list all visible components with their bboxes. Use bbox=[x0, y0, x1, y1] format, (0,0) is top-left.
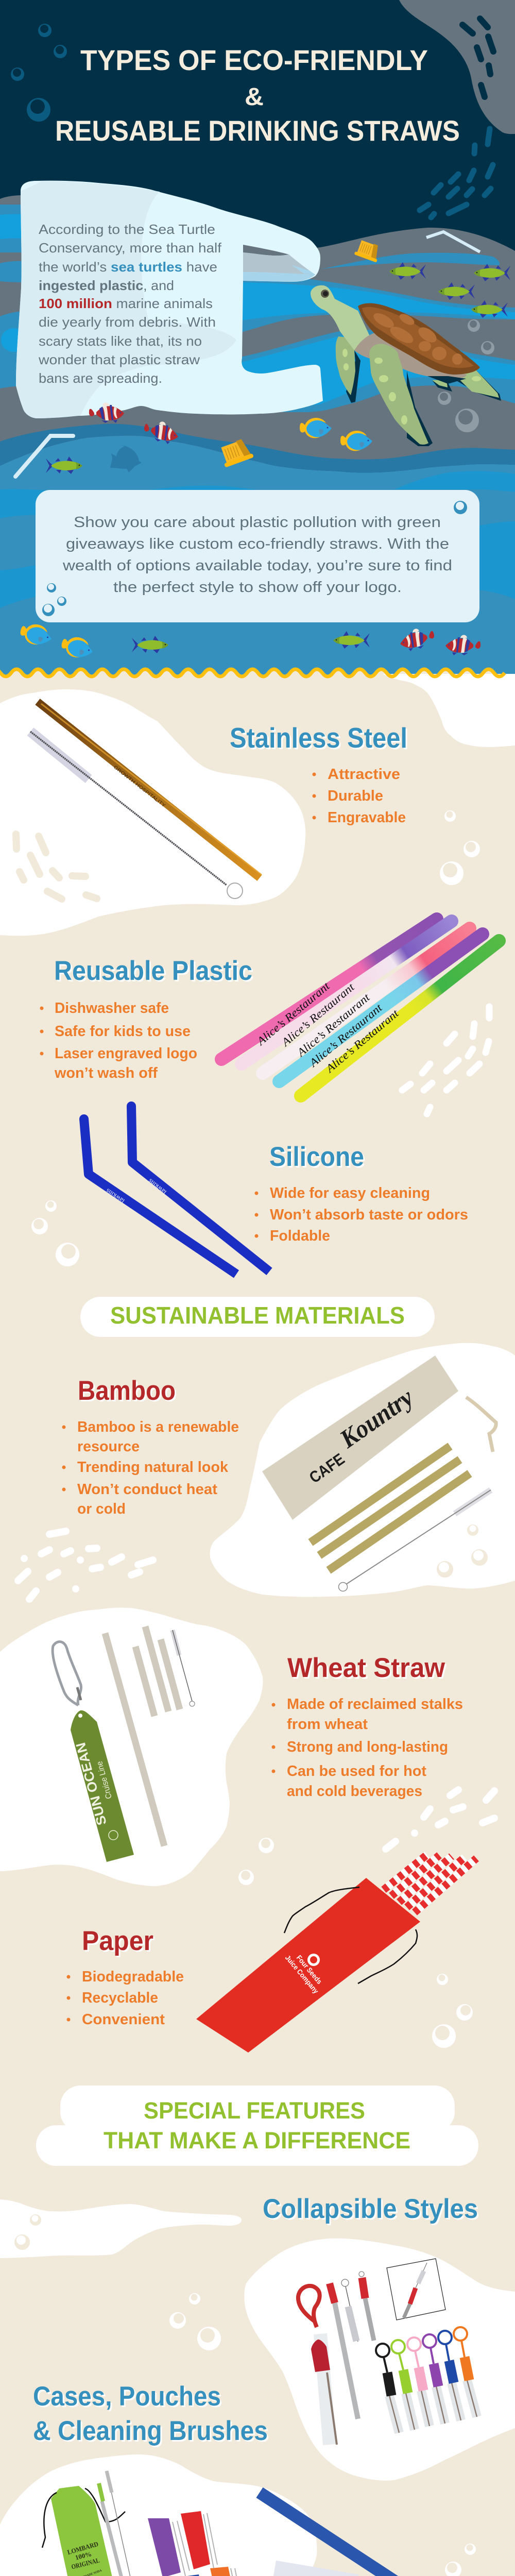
belly bbox=[354, 332, 467, 379]
text: bag statistics bbox=[38, 222, 222, 386]
bubbles top left bbox=[11, 24, 67, 122]
white blob bbox=[210, 1343, 515, 1597]
straw logos bbox=[105, 1177, 168, 1205]
title: REUSABLE DRINKING STRAWS bbox=[55, 114, 460, 147]
heading: Paper bbox=[82, 1926, 153, 1956]
text: bag statistics: ingested plastic , and bbox=[39, 278, 174, 293]
bullet list: won’t wash off bbox=[54, 1065, 158, 1081]
cream bubbles bbox=[437, 1524, 488, 1578]
bullet list: and cold beverages bbox=[287, 1783, 422, 1800]
image: bamboo straws bbox=[311, 1446, 470, 1570]
bullet list: from wheat bbox=[287, 1716, 368, 1733]
image: cleaning brush bbox=[30, 732, 243, 899]
panel: reusable plastic bbox=[40, 919, 499, 1114]
image: red pouch: Juice Company bbox=[284, 1954, 320, 1995]
text: bag statistics: 100 million marine animals bbox=[39, 296, 213, 311]
plastic bag bbox=[16, 181, 323, 418]
image: canvas pouch bbox=[262, 1355, 496, 1520]
panel: ocean hero bbox=[0, 0, 515, 680]
heading: Stainless Steel bbox=[231, 723, 409, 755]
bullet list: Foldable bbox=[270, 1228, 330, 1244]
image: green pouch bbox=[42, 2486, 125, 2576]
heading: Wheat Straw bbox=[287, 1653, 445, 1683]
image: blue silicone straw bbox=[260, 2493, 458, 2576]
title: & bbox=[245, 83, 264, 111]
image: wheat straw pieces bbox=[105, 1626, 180, 1846]
heading: Collapsible Styles bbox=[264, 2195, 479, 2226]
white dashes bbox=[386, 1790, 494, 1849]
white bubbles bbox=[440, 810, 480, 885]
text: intro: wealth of options available today, you’re sure to find bbox=[62, 557, 452, 574]
image: steel straw and brush bbox=[99, 2471, 142, 2576]
cream dashes bbox=[16, 834, 97, 899]
panel: silicone bbox=[31, 1101, 468, 1274]
text: intro bbox=[62, 514, 452, 596]
text: bag statistics: die yearly from debris. With bbox=[39, 314, 216, 330]
white dashes bbox=[402, 1007, 489, 1114]
panel: bamboo bbox=[18, 1343, 515, 1599]
bullet list bbox=[254, 1185, 468, 1244]
text: intro: giveaways like custom eco-friendly straws. With the bbox=[66, 536, 449, 552]
panel: stainless steel bbox=[0, 689, 480, 936]
bullet list: Dishwasher safe bbox=[55, 1000, 169, 1016]
fish school: clownfish bbox=[89, 402, 480, 655]
bullet list: Safe for kids to use bbox=[55, 1023, 191, 1040]
image: wheat brush bbox=[173, 1630, 195, 1706]
teal dashes bbox=[420, 129, 493, 217]
image: gold straw bbox=[38, 702, 262, 878]
ocean layers bbox=[0, 195, 515, 680]
text: bag statistics: scary stats like that, its no bbox=[39, 333, 202, 349]
image: six color cases bbox=[376, 2327, 477, 2433]
white blob top right bbox=[383, 674, 515, 747]
image: collapsible straw parts bbox=[330, 2272, 374, 2419]
bullet list: resource bbox=[77, 1438, 140, 1455]
bullet list: Convenient bbox=[82, 2011, 165, 2028]
heading: Bamboo bbox=[79, 1377, 177, 1408]
image: green pouch: LOMBARD bbox=[66, 2540, 99, 2556]
text: bag statistics: Conservancy, more than half bbox=[39, 240, 222, 256]
engraved labels: Alice’s Restaurant bbox=[278, 980, 357, 1049]
engraved labels bbox=[253, 979, 401, 1076]
text: bag statistics: According to the Sea Turtle bbox=[39, 222, 215, 237]
white blob right bbox=[244, 2239, 515, 2481]
panel: collapsible styles bbox=[0, 2194, 515, 2481]
image: red pouch bbox=[196, 1878, 420, 2053]
heading: Reusable Plastic bbox=[54, 956, 252, 986]
bullet list bbox=[40, 1000, 197, 1081]
fish silhouette bbox=[110, 445, 142, 472]
bullet list: Durable bbox=[328, 788, 383, 804]
text: intro: the perfect style to show off your logo. bbox=[113, 579, 402, 596]
engraved labels: Alice’s Restaurant bbox=[306, 1001, 385, 1070]
image: green tube case: Cruise Line bbox=[95, 1760, 114, 1800]
image: colored plastic straws bbox=[221, 919, 499, 1096]
fish school: blue tangs bbox=[18, 418, 372, 662]
bullet list: Wide for easy cleaning bbox=[270, 1185, 430, 1201]
panel: paper bbox=[67, 1838, 476, 2053]
image: gold straw: GROWTH HOSPITALITY bbox=[113, 765, 166, 808]
shell bbox=[358, 303, 480, 375]
bullet list: Biodegradable bbox=[82, 1969, 184, 1985]
white bubbles bbox=[31, 1200, 79, 1266]
title: TYPES OF ECO-FRIENDLY bbox=[80, 44, 428, 76]
bullet list: Trending natural look bbox=[77, 1459, 229, 1476]
rear flippers bbox=[432, 369, 501, 401]
text: bag statistics: wonder that plastic straw bbox=[38, 352, 200, 367]
straw logos: lawkins bbox=[147, 1177, 168, 1196]
white bubbles bbox=[238, 1838, 473, 2048]
bubbles grey bbox=[438, 319, 494, 432]
section heading: sustainable materials bbox=[80, 1297, 435, 1337]
image: small pouches bbox=[148, 2511, 245, 2576]
heading: Collapsible Styles bbox=[263, 2194, 478, 2224]
bullet list: Made of reclaimed stalks bbox=[287, 1696, 463, 1713]
bullet list bbox=[67, 1969, 184, 2028]
white bubbles bbox=[169, 2293, 221, 2350]
bullet list: Engravable bbox=[328, 809, 406, 826]
image: canvas pouch: CAFE bbox=[306, 1450, 348, 1487]
bullet list: Won’t conduct heat bbox=[77, 1481, 217, 1498]
heading: Wheat Straw bbox=[289, 1654, 447, 1685]
text: intro: Show you care about plastic pollution with green bbox=[74, 514, 441, 531]
image: red pouch: Four Seeds bbox=[295, 1954, 324, 1986]
white blob bbox=[0, 1607, 263, 1886]
image: silicone straws bbox=[79, 1101, 269, 1274]
bag shading bbox=[16, 181, 236, 418]
image: frosted case bbox=[263, 2561, 358, 2576]
section heading: special features: SPECIAL FEATURES bbox=[144, 2097, 365, 2124]
bullet list: Can be used for hot bbox=[287, 1763, 426, 1780]
image: green pouch: ORIGINAL bbox=[71, 2556, 100, 2571]
wave line bbox=[0, 669, 505, 676]
heading bbox=[33, 2381, 269, 2448]
heading: & Cleaning Brushes bbox=[35, 2417, 269, 2448]
image: green tube case: SUN OCEAN bbox=[73, 1741, 110, 1827]
bullet list bbox=[272, 1696, 463, 1800]
grey blob top right bbox=[399, 0, 515, 134]
title bbox=[55, 44, 460, 147]
heading: Stainless Steel bbox=[230, 722, 407, 754]
white blob left bbox=[0, 2199, 242, 2258]
panel: wheat straw bbox=[0, 1607, 494, 1886]
white bubbles bbox=[311, 2544, 476, 2576]
bullet list bbox=[62, 1419, 239, 1517]
text: bag statistics: the world’s sea turtles have bbox=[39, 259, 217, 275]
image: bamboo brush bbox=[339, 1490, 491, 1591]
bullet list: or cold bbox=[77, 1501, 126, 1517]
debris: bottle caps bbox=[218, 239, 382, 468]
front left flipper shadow and flipper bbox=[346, 350, 360, 403]
image: canvas pouch: Kountry bbox=[334, 1382, 419, 1454]
heading: Paper bbox=[83, 1927, 155, 1958]
heading: Silicone bbox=[271, 1143, 366, 1174]
large front flipper bbox=[407, 371, 433, 446]
cream bubbles bbox=[14, 2214, 41, 2250]
bullet list: Attractive bbox=[328, 766, 400, 783]
bag handle gap bbox=[243, 245, 289, 256]
cream ground with wave edge bbox=[0, 669, 515, 721]
heading: & Cleaning Brushes bbox=[33, 2416, 268, 2446]
debris: plastic straws bbox=[15, 232, 480, 477]
white dashes bbox=[18, 1531, 153, 1599]
dashes on grey blob bbox=[462, 19, 493, 97]
image: paper straws bbox=[384, 1855, 476, 1912]
bullet list: Won’t absorb taste or odors bbox=[270, 1207, 468, 1223]
engraved labels: Alice’s Restaurant bbox=[294, 990, 372, 1060]
image: green pouch: 100% bbox=[74, 2550, 92, 2562]
neck and head bbox=[311, 285, 372, 350]
straw logos: lawkins bbox=[105, 1187, 126, 1205]
fish school: green bbox=[46, 262, 510, 653]
heading: Cases, Pouches bbox=[35, 2383, 222, 2413]
white blob bbox=[0, 2454, 317, 2576]
heading: Cases, Pouches bbox=[33, 2381, 221, 2412]
image: carabiner bbox=[53, 1642, 81, 1705]
bullet list: Laser engraved logo bbox=[55, 1045, 197, 1062]
bullet list: Strong and long-lasting bbox=[287, 1739, 448, 1755]
heading: Silicone bbox=[269, 1142, 364, 1172]
bullet list bbox=[312, 766, 406, 826]
icon: sea turtle bbox=[311, 285, 501, 446]
bullet list: Recyclable bbox=[82, 1990, 158, 2006]
section heading: special features bbox=[36, 2086, 478, 2166]
image: red carry case bbox=[298, 2286, 337, 2445]
panel: cases, pouches and brushes bbox=[0, 2381, 476, 2576]
panel: intro text box bbox=[36, 490, 479, 622]
bullet list: Bamboo is a renewable bbox=[77, 1419, 239, 1435]
image: green tube case bbox=[71, 1710, 134, 1862]
heading: Reusable Plastic bbox=[56, 957, 254, 988]
section heading: sustainable materials: SUSTAINABLE MATERIALS bbox=[110, 1302, 405, 1329]
engraved labels: Alice’s Restaurant bbox=[322, 1006, 401, 1076]
white blob bbox=[0, 689, 305, 936]
heading: Bamboo bbox=[78, 1376, 176, 1406]
section heading: special features: THAT MAKE A DIFFERENCE bbox=[104, 2127, 410, 2154]
bubbles in box bbox=[42, 501, 467, 616]
text: bag statistics: bans are spreading. bbox=[39, 370, 162, 386]
engraved labels: Alice’s Restaurant bbox=[253, 979, 332, 1048]
image: inset detail bbox=[387, 2259, 445, 2320]
